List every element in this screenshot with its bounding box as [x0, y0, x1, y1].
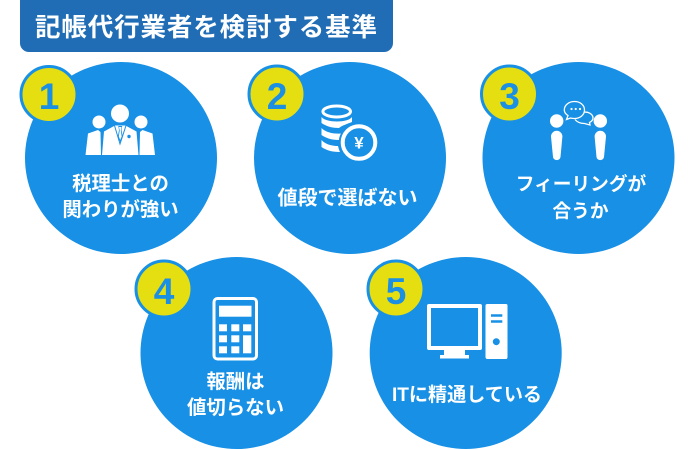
icon: coins with yen [322, 106, 375, 159]
badge 2 [249, 66, 305, 122]
panel: 5 IT savvy [368, 257, 562, 449]
badge 5: 5 [386, 271, 406, 312]
badge 1 [21, 66, 77, 122]
label: 報酬は [206, 371, 265, 393]
panel: 1 tax accountant relationship [21, 62, 217, 254]
panel: 1 tax accountant relationship: 関わりが強い [62, 198, 179, 221]
icon: calculator [214, 298, 256, 359]
label: 税理士との [72, 173, 169, 195]
panel: 3 feeling match [482, 62, 674, 254]
title banner: 記帳代行業者を検討する基準 [35, 14, 377, 42]
title banner [20, 0, 393, 52]
label: 値段で選ばない [278, 186, 418, 210]
badge 5 [368, 261, 424, 317]
panel: 3 feeling match: 合うか [552, 200, 609, 222]
icon: desktop computer [427, 304, 508, 359]
label: フィーリングが [516, 174, 647, 194]
badge 4: 4 [154, 271, 175, 312]
badge 1: 1 [39, 76, 59, 117]
badge 3 [482, 66, 538, 122]
label: ITに精通している [392, 384, 542, 406]
panel: 2 do not choose by price [249, 62, 446, 254]
icon: two people talking [550, 102, 607, 160]
badge 3: 3 [499, 76, 520, 117]
panel: 4 do not cut fees [136, 257, 332, 449]
icon: coins with yen: ¥ [354, 134, 364, 152]
icon: three business people [86, 104, 155, 155]
badge 4 [136, 261, 192, 317]
panel: 4 do not cut fees: 値切らない [187, 397, 284, 419]
badge 2: 2 [267, 76, 287, 117]
